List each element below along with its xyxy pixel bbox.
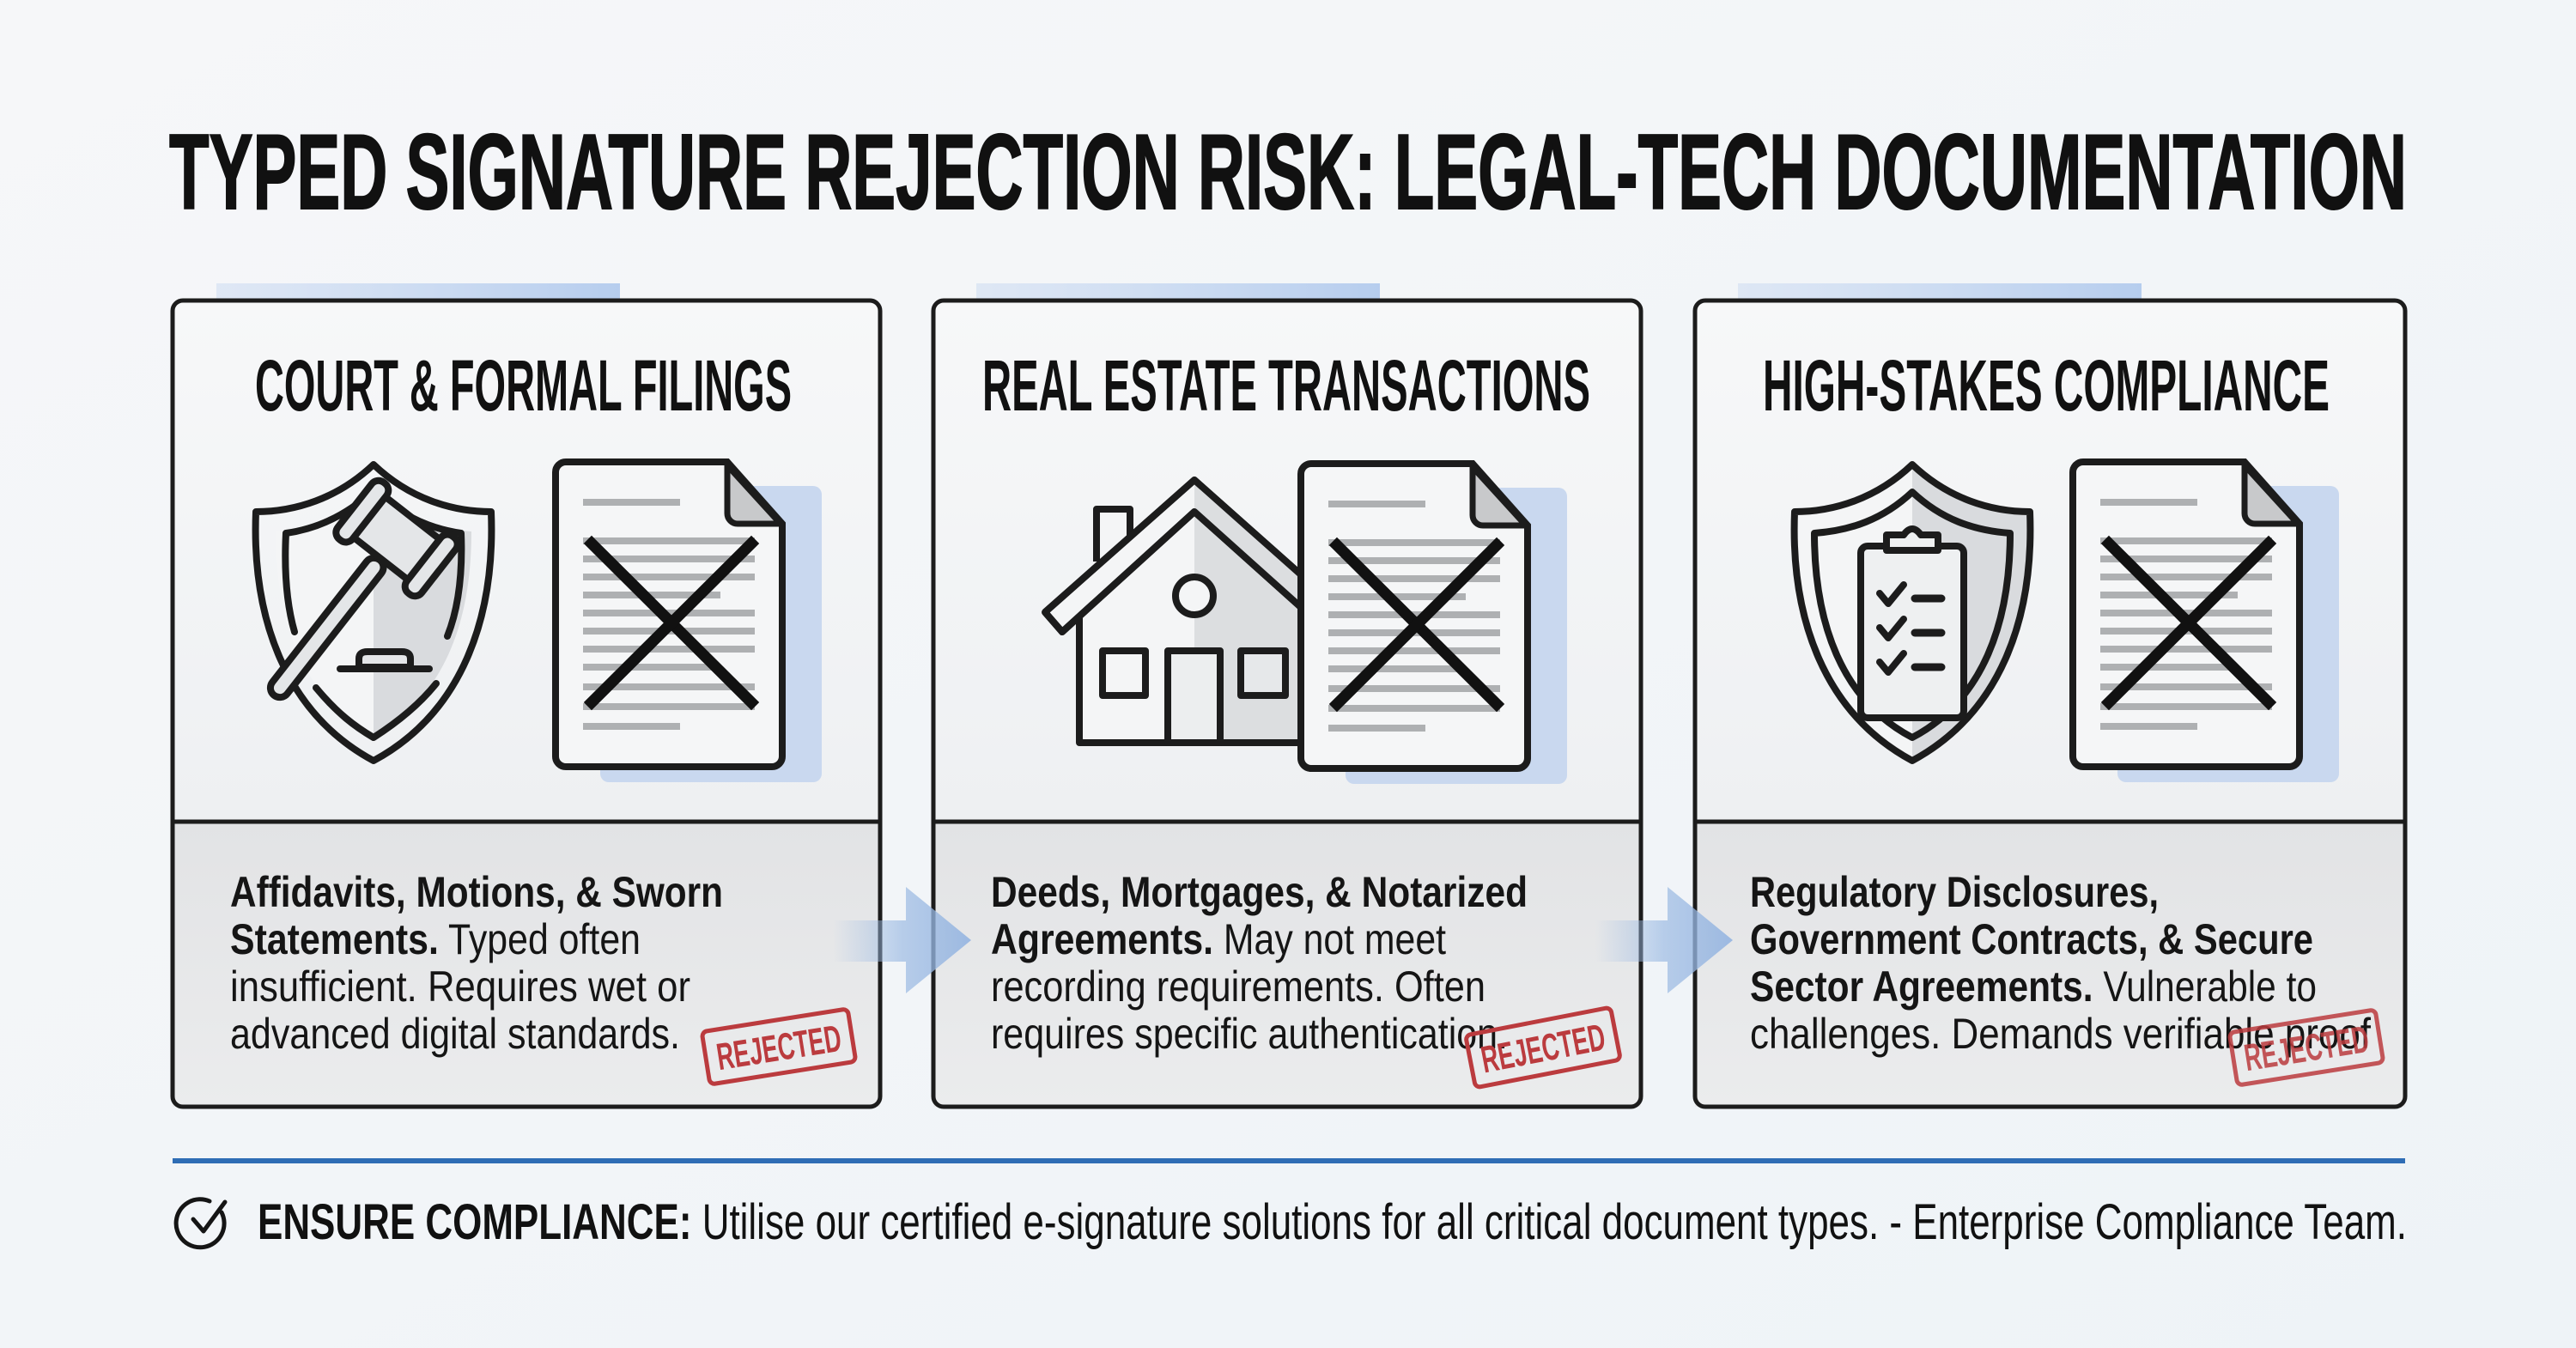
- text block: compliance: Regulatory Disclosures,: [1750, 868, 2159, 916]
- text block: court: insufficient. Requires wet or: [230, 962, 690, 1011]
- text block: court: [230, 868, 723, 1058]
- text block: real estate: requires specific authentication.: [991, 1010, 1508, 1058]
- stamp: rejected: REJECTED: [714, 1017, 844, 1078]
- stamp: rejected: [702, 1009, 856, 1084]
- text block: compliance: Sector Agreements. Vulnerable to: [1750, 962, 2317, 1011]
- icon: check circle: [176, 1199, 225, 1248]
- stamp: rejected: REJECTED: [2241, 1018, 2372, 1079]
- panel: court & formal filings: [173, 283, 880, 1107]
- arrow: panel 2 to 3: [1595, 887, 1733, 993]
- text block: real estate: recording requirements. Often: [991, 962, 1485, 1011]
- text block: real estate: Agreements. May not meet: [991, 915, 1446, 963]
- heading: court: COURT & FORMAL FILINGS: [255, 345, 792, 426]
- stamp: rejected: REJECTED: [1478, 1016, 1609, 1081]
- text block: compliance: Government Contracts, & Secure: [1750, 915, 2313, 963]
- icon: rejected document: [556, 462, 822, 782]
- icon: rejected document: [2073, 462, 2339, 782]
- text block: real estate: [991, 868, 1528, 1058]
- panel: real estate transactions: [933, 283, 1641, 1107]
- stamp: rejected: [2229, 1010, 2384, 1085]
- text block: court: Statements. Typed often: [230, 915, 641, 963]
- arrow: panel 1 to 2: [833, 887, 971, 993]
- text block: court: advanced digital standards.: [230, 1010, 680, 1058]
- panel: high-stakes compliance: [1695, 283, 2405, 1107]
- heading: real estate: REAL ESTATE TRANSACTIONS: [982, 345, 1590, 426]
- text block: court: Affidavits, Motions, & Sworn: [230, 868, 723, 916]
- stamp: rejected: [1466, 1007, 1620, 1088]
- icon: rejected document: [1301, 464, 1567, 784]
- text block: compliance: [1750, 868, 2371, 1058]
- icon: shield with gavel: [232, 465, 491, 761]
- icon: house: [1045, 480, 1303, 743]
- icon: shield with clipboard: [1795, 465, 2030, 761]
- text block: compliance: challenges. Demands verifiable proof: [1750, 1010, 2371, 1058]
- text block: real estate: Deeds, Mortgages, & Notarized: [991, 868, 1528, 916]
